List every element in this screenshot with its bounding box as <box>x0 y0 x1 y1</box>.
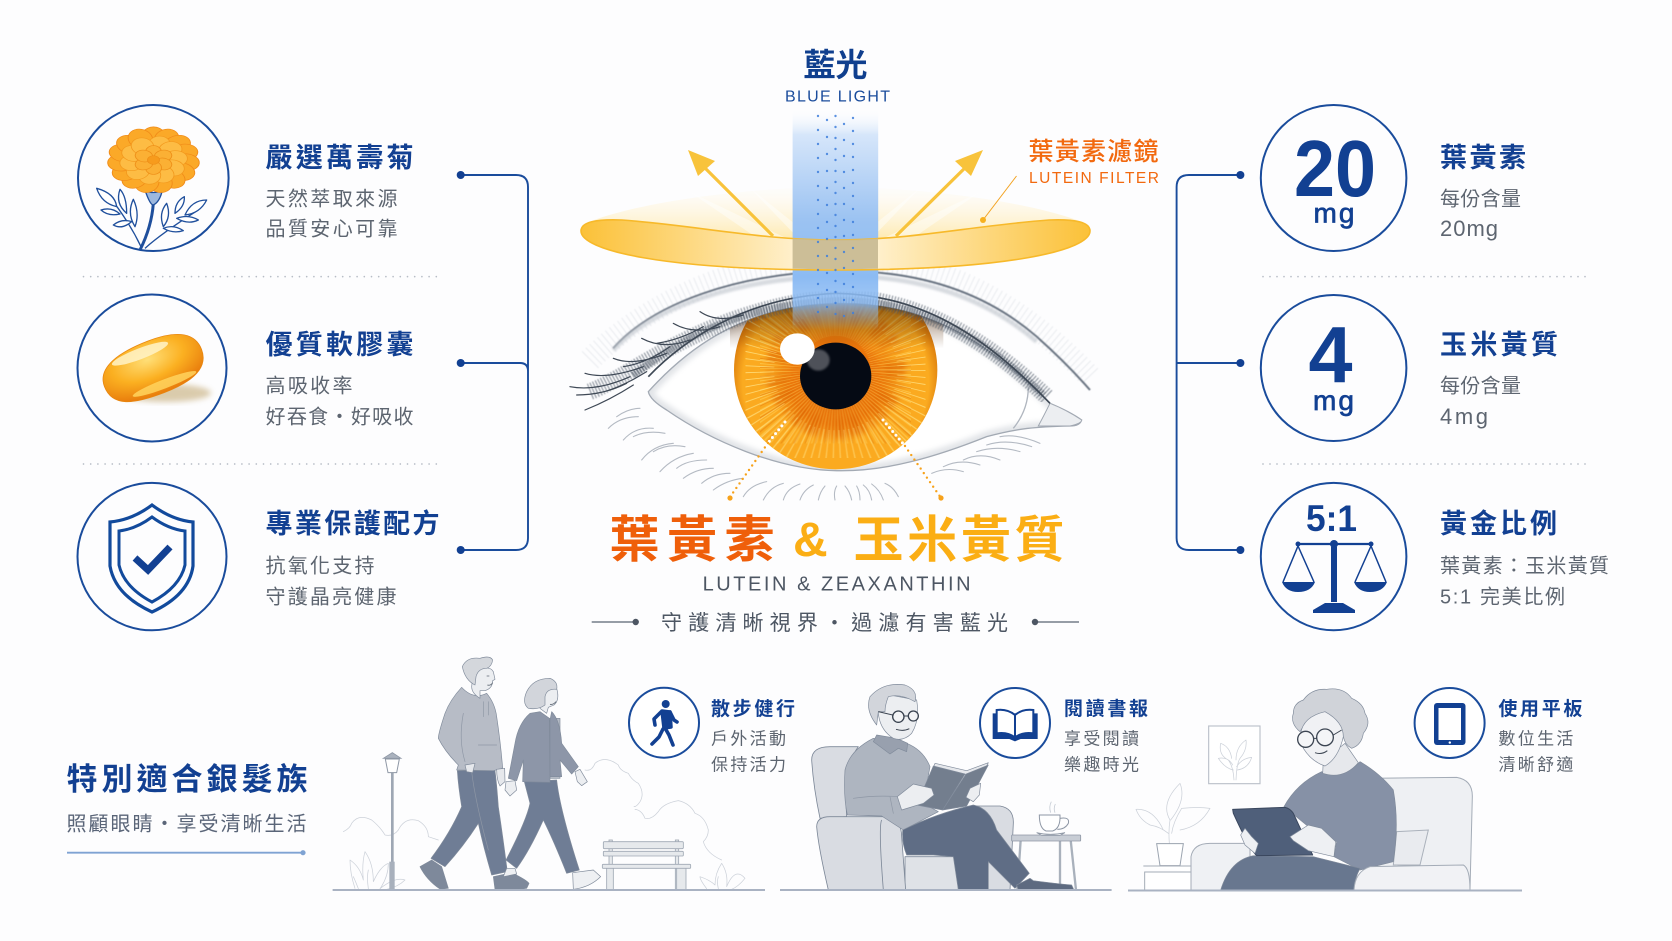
collar and head <box>868 684 918 754</box>
text: protection <box>266 508 440 609</box>
side table and cup <box>1012 802 1081 890</box>
arrow: reflected left <box>688 150 773 236</box>
divider <box>1263 276 1591 278</box>
iris <box>730 303 944 470</box>
badge: 20 mg <box>1261 105 1406 251</box>
blue light beam <box>793 108 878 330</box>
blue light particles <box>818 116 853 320</box>
text: softgel: 優質軟膠囊 <box>266 330 414 360</box>
heading: for seniors: 特別適合銀髮族 <box>66 762 308 797</box>
icon: shield check <box>78 483 226 630</box>
text: walking: 戶外活動 <box>711 730 786 748</box>
text: ratio: 葉黃素：玉米黃質 <box>1440 555 1609 578</box>
scene: man reading <box>812 684 1081 890</box>
armchair <box>812 747 1013 890</box>
eye <box>570 258 1090 500</box>
icon: tablet <box>1415 688 1485 758</box>
text: walking: 保持活力 <box>711 756 786 774</box>
badge: 20 mg: mg <box>1314 198 1354 229</box>
text: zeaxanthin dose: 每份含量 <box>1440 375 1521 398</box>
label: blue light: 藍光 <box>804 47 868 83</box>
hands <box>1241 825 1336 857</box>
bracket connector left <box>457 171 528 554</box>
badge: 20 mg: 20 <box>1294 124 1376 213</box>
text: lutein dose: 每份含量 <box>1440 188 1521 211</box>
subtitle english: LUTEIN & ZEAXANTHIN <box>703 574 971 596</box>
label: blue light <box>785 47 890 106</box>
icon: walking <box>629 688 699 758</box>
badge: 5:1 scale <box>1261 483 1406 630</box>
ground line: walk <box>333 889 765 891</box>
text: walking: 散步健行 <box>711 698 795 720</box>
text: ratio: 5:1 完美比例 <box>1440 586 1565 609</box>
dotted callouts from iris <box>727 420 944 501</box>
label: lutein filter: 葉黃素濾鏡 <box>1028 138 1158 166</box>
bench <box>602 840 691 890</box>
text: lutein dose: 葉黃素 <box>1440 143 1526 173</box>
panel: left features <box>78 105 528 630</box>
ground line: tablet <box>1128 890 1522 892</box>
text: reading: 樂趣時光 <box>1064 756 1139 774</box>
text: softgel: 好吞食・好吸收 <box>266 406 414 429</box>
pillow <box>1393 830 1428 865</box>
man walking <box>420 657 529 890</box>
sweater <box>1284 762 1396 870</box>
potted plant <box>1136 783 1210 890</box>
woman walking <box>503 678 601 889</box>
text: marigold <box>266 143 414 241</box>
text: lutein dose: 20mg <box>1440 216 1498 241</box>
skirt <box>1221 856 1360 890</box>
text: ratio: 黃金比例 <box>1440 509 1557 539</box>
text: tablet: 使用平板 <box>1498 698 1582 720</box>
icon: book <box>980 688 1050 758</box>
shoe <box>1017 878 1074 890</box>
badge: 5:1 scale: 5:1 <box>1306 498 1357 539</box>
main title <box>610 512 1064 568</box>
text: tablet <box>1498 698 1582 774</box>
text: protection: 抗氧化支持 <box>266 555 374 578</box>
hands <box>853 783 981 813</box>
text: protection: 專業保護配方 <box>266 508 440 539</box>
text: reading <box>1064 697 1148 774</box>
badge: 4 mg <box>1261 295 1406 441</box>
badge: 4 mg: 4 <box>1308 310 1353 399</box>
text: marigold: 天然萃取來源 <box>266 188 398 211</box>
label: blue light: BLUE LIGHT <box>785 88 890 106</box>
heading: for seniors: 照顧眼睛・享受清晰生活 <box>66 813 306 836</box>
heading: for seniors <box>66 762 308 855</box>
illustration: eye with lutein filter <box>570 108 1090 501</box>
text: softgel <box>266 330 414 429</box>
label: lutein filter: LUTEIN FILTER <box>1029 170 1159 187</box>
lens top surface <box>584 187 1087 240</box>
lutein filter lens <box>581 220 1090 270</box>
divider <box>84 276 437 278</box>
main title: 葉黃素 <box>610 512 774 568</box>
text: protection: 守護晶亮健康 <box>266 586 396 609</box>
icon: softgel capsule <box>78 294 226 442</box>
text: zeaxanthin dose: 玉米黃質 <box>1440 330 1558 360</box>
main title: & <box>793 514 828 567</box>
lens leader line <box>980 176 1016 223</box>
panel: right dosage <box>1177 105 1609 630</box>
divider <box>84 463 437 465</box>
icon: marigold flower <box>78 105 229 251</box>
armchair front arm <box>1354 865 1470 890</box>
divider <box>1263 463 1591 465</box>
tagline: 守護清晰視界・過濾有害藍光 <box>661 612 1008 635</box>
scene: walking couple <box>343 657 745 890</box>
text: tablet: 清晰舒適 <box>1498 756 1573 774</box>
text: lutein dose <box>1440 143 1526 241</box>
bracket connector right <box>1177 171 1244 554</box>
text: marigold: 品質安心可靠 <box>266 218 398 241</box>
text: softgel: 高吸收率 <box>266 375 352 398</box>
lamp post <box>383 753 401 890</box>
text: walking <box>711 698 795 774</box>
bushes and plants <box>343 760 745 889</box>
text: marigold: 嚴選萬壽菊 <box>266 143 414 173</box>
armchair left arm <box>1191 843 1250 890</box>
tablet device <box>1233 807 1313 856</box>
text: zeaxanthin dose: 4mg <box>1440 404 1488 429</box>
text: zeaxanthin dose <box>1440 330 1558 429</box>
head and hair <box>1292 689 1368 775</box>
text: reading: 享受閱讀 <box>1064 730 1139 748</box>
badge: 4 mg: mg <box>1313 385 1354 416</box>
wall picture <box>1209 726 1260 784</box>
ground line: reading <box>780 889 1112 891</box>
text: reading: 閱讀書報 <box>1064 697 1148 720</box>
trousers <box>902 805 1029 890</box>
text: ratio <box>1440 509 1609 609</box>
open book <box>917 763 988 810</box>
sweater <box>845 738 938 830</box>
scene: woman with tablet <box>1136 689 1472 890</box>
main title: 玉米黃質 <box>854 512 1064 568</box>
icon: balance scale <box>1282 540 1387 613</box>
armchair back <box>1363 777 1472 890</box>
text: tablet: 數位生活 <box>1498 730 1573 748</box>
label: lutein filter <box>1028 138 1159 187</box>
arrow: reflected right <box>896 150 983 236</box>
